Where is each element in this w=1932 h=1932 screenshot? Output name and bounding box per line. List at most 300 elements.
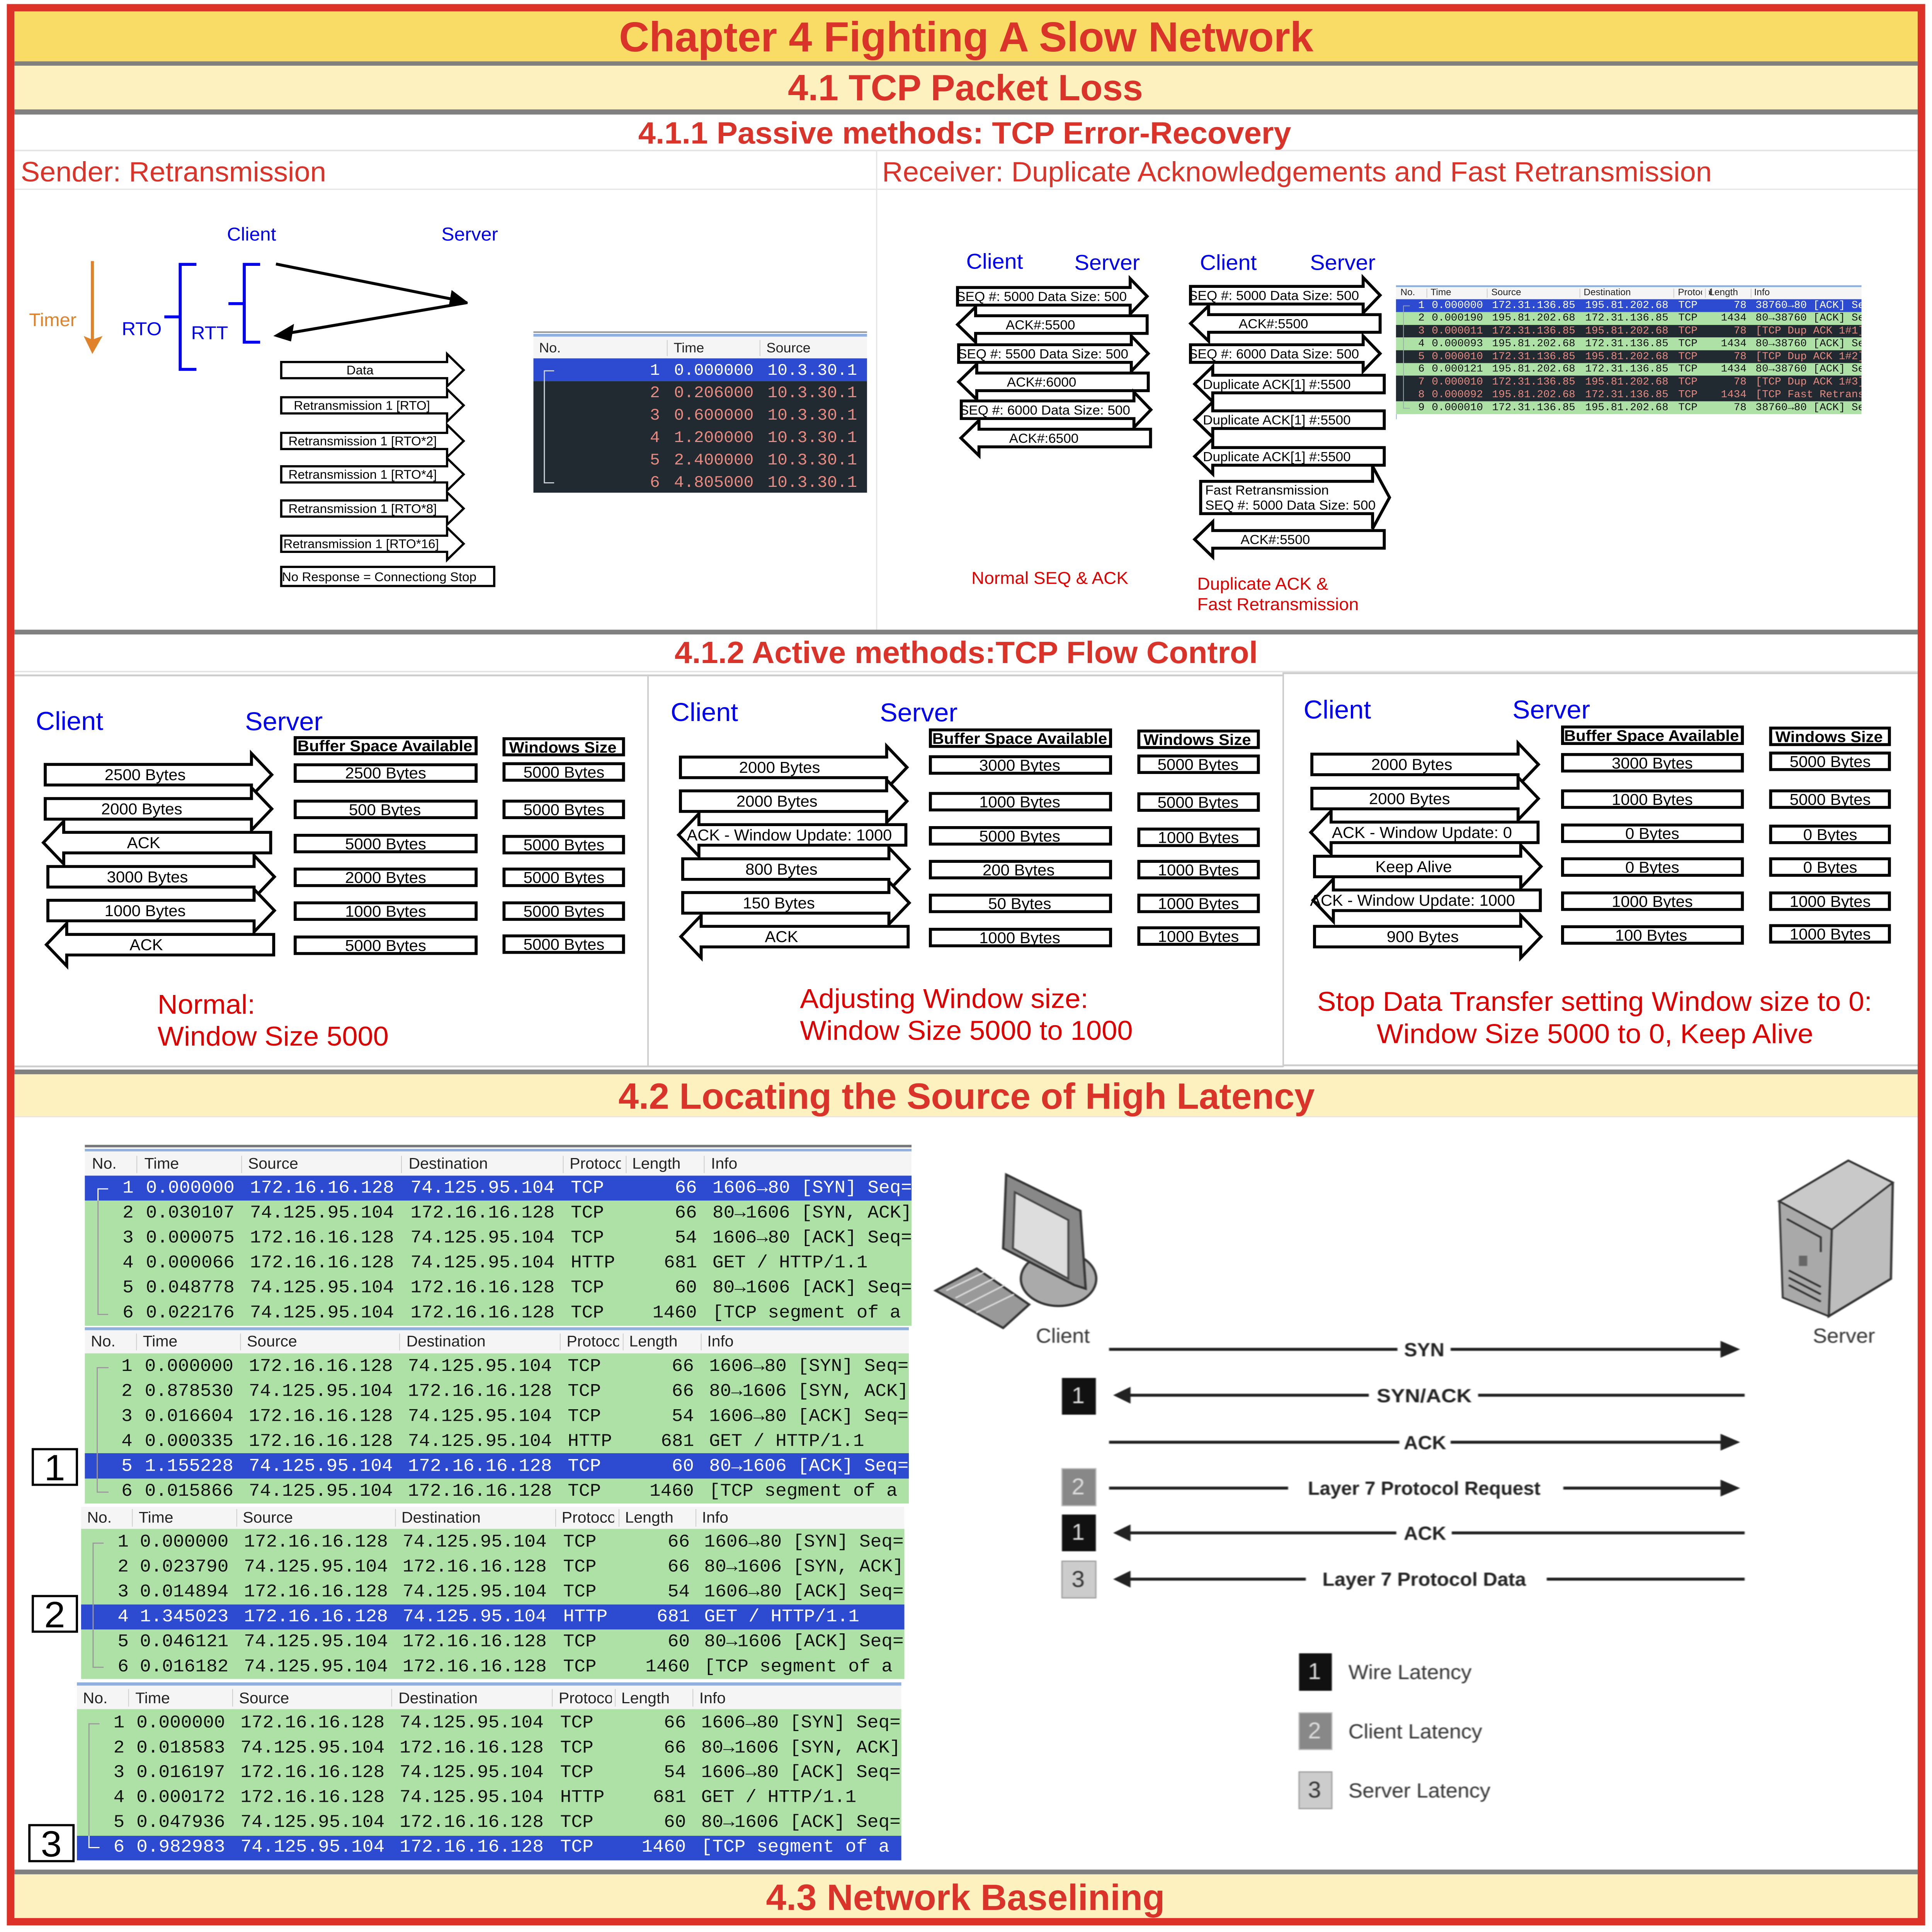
arrow: SEQ 6000: [960, 392, 1151, 427]
table: fast retransmission capture: 78: [1734, 402, 1747, 413]
arrow: ACK: ACK: [127, 834, 160, 852]
heading: 4.1.1 Passive methods: 4.1.1 Passive methods: TCP Error-Recovery: [638, 116, 1291, 150]
table: client latency capture: 0.023790: [140, 1557, 228, 1577]
table: server latency capture: HTTP: [560, 1787, 604, 1808]
arrow: 2000 Bytes: 2000 Bytes: [736, 793, 818, 810]
buffer values: 1000 Bytes: [979, 793, 1060, 811]
table: wire latency capture: 1: [121, 1357, 133, 1377]
title band: Chapter 4: Chapter 4 Fighting A Slow Network: [619, 14, 1314, 61]
client label: Client: [1304, 696, 1371, 724]
buffer values: 50 Bytes: [988, 895, 1051, 913]
buffer values: 5000 Bytes: [345, 835, 426, 853]
table: fast retransmission capture: 2: [1418, 312, 1425, 324]
table: baseline capture: No.: [92, 1155, 117, 1172]
table: client latency capture: 0.000000: [140, 1532, 228, 1552]
panel: normal flow control: [36, 707, 624, 1052]
title band: Chapter 4: [14, 11, 1918, 66]
arrow: ACK 6500: [961, 420, 1151, 456]
window values: 1000 Bytes: [1158, 829, 1239, 847]
table: fast retransmission capture: 195.81.202.68: [1585, 325, 1668, 337]
caption: stop transfer: Stop Data Transfer setting Window size to 0:: [1317, 986, 1872, 1017]
table: baseline capture: 2: [122, 1203, 134, 1223]
table: wire latency capture: 0.000335: [145, 1431, 233, 1452]
table: fast retransmission capture: 172.31.136.85: [1492, 325, 1575, 337]
arrow: duplicate ACK 1: Duplicate ACK[1] #:5500: [1203, 378, 1351, 392]
table: wire latency capture: 74.125.95.104: [249, 1381, 393, 1401]
table: fast retransmission capture: 7: [1418, 376, 1425, 388]
table: wire latency capture: TCP: [568, 1481, 601, 1502]
table: wire latency capture: 0.878530: [145, 1381, 233, 1401]
table: client latency capture: 66: [668, 1532, 690, 1552]
arrow: ACK: [46, 923, 274, 966]
arrow: RTO*4: Retransmission 1 [RTO*4]: [289, 467, 437, 481]
table: server latency capture: 1460: [641, 1837, 686, 1857]
table: wire latency capture: 172.16.16.128: [249, 1406, 393, 1427]
arrow: keep alive: Keep Alive: [1375, 858, 1452, 876]
legend: 1: [1308, 1658, 1321, 1684]
table: fast retransmission capture: 0.000093: [1432, 338, 1483, 350]
table: fast retransmission capture: 0.000092: [1432, 389, 1483, 401]
table: server latency capture: 80→1606 [ACK] Seq=1: [701, 1813, 912, 1833]
number box 3: 3: [41, 1823, 62, 1864]
number box 2: 2: [44, 1594, 65, 1635]
arrow: ACK: ACK: [765, 928, 798, 946]
table: wire latency capture: 2: [121, 1381, 133, 1401]
table: wire latency capture: 172.16.16.128: [408, 1456, 552, 1476]
table: server latency capture: Length: [621, 1689, 670, 1707]
table: wire latency capture: 74.125.95.104: [408, 1406, 552, 1427]
arrow: 3000 Bytes: [48, 855, 274, 898]
heading: 4.1.1 Passive methods: [14, 116, 1918, 630]
table: client latency capture: 6: [117, 1657, 129, 1677]
table: fast retransmission capture: 78: [1734, 300, 1747, 311]
number box 2: [33, 1594, 77, 1635]
table: fast retransmission capture: 0.000000: [1432, 300, 1483, 311]
server label: Server: [441, 224, 498, 245]
table: baseline capture: 66: [675, 1203, 697, 1223]
table: retransmission capture: 4.805000: [674, 473, 753, 492]
arrow: SEQ 6000: SEQ #: 6000 Data Size: 500: [960, 403, 1130, 418]
table: fast retransmission capture: 0.000010: [1432, 402, 1483, 413]
table: client latency capture: 5: [117, 1632, 129, 1652]
table: server latency capture: 172.16.16.128: [240, 1763, 384, 1783]
header: windows size: Windows Size: [1776, 728, 1883, 745]
table: baseline capture: [85, 1145, 978, 1326]
table: baseline capture: 80→1606 [ACK] Seq=1: [713, 1278, 923, 1298]
buffer values: 1000 Bytes: [979, 929, 1060, 947]
arrow: 2000 Bytes: [1312, 743, 1538, 786]
panel: adjusting window size: [671, 698, 1259, 1046]
caption: stop transfer: Window Size 5000 to 0, Keep Alive: [1377, 1019, 1813, 1049]
client label: Client: [671, 698, 738, 727]
table: fast retransmission capture: TCP: [1678, 351, 1697, 362]
table: baseline capture: 60: [675, 1278, 697, 1298]
table: fast retransmission capture: [1396, 285, 1916, 419]
table: wire latency capture: No.: [91, 1332, 116, 1350]
table: baseline capture: 0.022176: [146, 1303, 235, 1323]
window values: 5000 Bytes: [1158, 756, 1238, 773]
table: baseline capture: 3: [122, 1228, 134, 1248]
table: wire latency capture: [TCP segment of a: [709, 1481, 898, 1502]
table: baseline capture: TCP: [571, 1278, 604, 1298]
arrow: ACK 5500: ACK#:5500: [1239, 317, 1308, 331]
panel: stop data transfer: [1304, 696, 1889, 1049]
table: fast retransmission capture: 172.31.136.85: [1585, 312, 1668, 324]
table: client latency capture: 1460: [645, 1657, 690, 1677]
table: baseline capture: 172.16.16.128: [250, 1228, 394, 1248]
section band: 4.1 TCP Packet Loss: 4.1 TCP Packet Loss: [788, 68, 1143, 108]
buffer values: 200 Bytes: [983, 861, 1054, 879]
table: client latency capture: 0.046121: [140, 1632, 228, 1652]
arrow: Data: Data: [347, 363, 374, 377]
table: fast retransmission capture: 172.31.136.85: [1585, 389, 1668, 401]
table: client latency capture: Destination: [401, 1509, 481, 1526]
table: wire latency capture: 74.125.95.104: [408, 1357, 552, 1377]
table: retransmission capture: 10.3.30.1: [767, 473, 857, 492]
table: fast retransmission capture: TCP: [1678, 389, 1697, 401]
table: fast retransmission capture: 80→38760 [ACK] Seq=1: [1755, 312, 1884, 324]
icon: server latency 3: 3: [1071, 1566, 1085, 1592]
arrow: ACK: ACK: [1404, 1523, 1446, 1544]
table: server latency capture: 2: [114, 1738, 124, 1758]
table: client latency capture: 0.016182: [140, 1657, 228, 1677]
table: client latency capture: HTTP: [563, 1607, 607, 1627]
table: server latency capture: 0.016197: [136, 1763, 225, 1783]
arrow: ACK: [681, 915, 908, 958]
table: client latency capture: TCP: [563, 1657, 597, 1677]
table: fast retransmission capture: 78: [1734, 376, 1747, 388]
buffer values: 1000 Bytes: [345, 903, 426, 920]
table: client latency capture: 66: [668, 1557, 690, 1577]
table: wire latency capture: 60: [672, 1456, 694, 1476]
window values: 5000 Bytes: [524, 801, 604, 818]
table: server latency capture: 1: [114, 1713, 124, 1733]
arrow: layer 7 data: [1113, 1569, 1745, 1590]
table: wire latency capture: 1.155228: [145, 1456, 233, 1476]
icon: client latency 2: [1062, 1469, 1096, 1506]
arrow: SEQ 5000: [956, 279, 1147, 314]
table: fast retransmission capture: 3: [1418, 325, 1425, 337]
table: baseline capture: Info: [711, 1155, 737, 1172]
window values: 5000 Bytes: [524, 764, 604, 781]
arrow: RTO: [281, 389, 464, 422]
arrow: ACK 6500: ACK#:6500: [1009, 431, 1078, 446]
table: retransmission capture: 2.400000: [674, 451, 753, 469]
icon: wire latency 1: 1: [1071, 1519, 1085, 1545]
caption: duplicate: [1197, 574, 1359, 614]
table: fast retransmission capture: 0.000190: [1432, 312, 1483, 324]
table: fast retransmission capture: 8: [1418, 389, 1425, 401]
client label: Client: [1036, 1325, 1090, 1347]
table: fast retransmission capture: [TCP Dup ACK 1#2] 38: [1755, 351, 1884, 362]
panel: duplicate ACK and fast retransmission: [1189, 251, 1389, 614]
table: server latency capture: 0.982983: [136, 1837, 225, 1857]
table: server latency capture: 5: [114, 1813, 124, 1833]
table: fast retransmission capture: Time: [1430, 287, 1451, 298]
window values: 1000 Bytes: [1790, 893, 1871, 910]
caption: adjusting: Window Size 5000 to 1000: [800, 1015, 1133, 1046]
arrow: SEQ 5000: [1189, 277, 1380, 313]
arrow: RTO*8: [281, 492, 464, 525]
table: wire latency capture: Source: [247, 1332, 297, 1350]
arrow: RTO*4: [281, 458, 464, 490]
table: server latency capture: 66: [664, 1713, 686, 1733]
window values: 5000 Bytes: [524, 903, 604, 920]
table: baseline capture: 74.125.95.104: [410, 1253, 554, 1273]
table: fast retransmission capture: 6: [1418, 363, 1425, 375]
table: server latency capture: 172.16.16.128: [400, 1837, 544, 1857]
table: client latency capture: GET / HTTP/1.1: [704, 1607, 859, 1627]
table: baseline capture: 0.000066: [146, 1253, 235, 1273]
window values: 0 Bytes: [1803, 859, 1857, 876]
table: fast retransmission capture: TCP: [1678, 376, 1697, 388]
timer label: Timer: [29, 310, 77, 330]
table: server latency capture: GET / HTTP/1.1: [701, 1787, 856, 1808]
icon: wire latency 1: [1062, 1515, 1096, 1551]
table: fast retransmission capture: 195.81.202.68: [1585, 351, 1668, 362]
table: baseline capture: 1606→80 [ACK] Seq=1: [713, 1228, 923, 1248]
table: retransmission capture: 6: [650, 473, 660, 492]
caption: adjusting: Adjusting Window size:: [800, 983, 1088, 1014]
table: fast retransmission capture: 9: [1418, 402, 1425, 413]
table: client latency capture: Length: [625, 1509, 673, 1526]
table: retransmission capture: 0.206000: [674, 384, 753, 402]
icon: timer arrow: [84, 261, 102, 354]
panel: latency diagram: [935, 1161, 1893, 1809]
table: client latency capture: 1.345023: [140, 1607, 228, 1627]
window values: 1000 Bytes: [1158, 895, 1239, 913]
arrow: SYN: SYN: [1404, 1339, 1444, 1361]
caption: normal: [158, 989, 389, 1052]
buffer values: 100 Bytes: [1615, 927, 1687, 944]
header: buffer space: Buffer Space Available: [1564, 727, 1739, 744]
server label: Server: [1310, 251, 1376, 275]
table: wire latency capture: TCP: [568, 1357, 601, 1377]
section band: 4.3 Network Baselining: 4.3 Network Baselining: [766, 1877, 1165, 1918]
table: retransmission capture: [533, 332, 867, 493]
table: server latency capture: 74.125.95.104: [240, 1738, 384, 1758]
table: retransmission capture: 5: [650, 451, 660, 469]
arrow: ACK 5500: ACK#:5500: [1006, 318, 1075, 332]
table: fast retransmission capture: 172.31.136.85: [1585, 363, 1668, 375]
table: baseline capture: 681: [664, 1253, 697, 1273]
table: server latency capture: 74.125.95.104: [400, 1713, 544, 1733]
table: wire latency capture: [85, 1327, 975, 1503]
table: client latency capture: 172.16.16.128: [244, 1532, 388, 1552]
table: server latency capture: 681: [653, 1787, 686, 1808]
table: fast retransmission capture: 80→38760 [ACK] Seq=1: [1755, 363, 1884, 375]
table: baseline capture: 172.16.16.128: [410, 1203, 554, 1223]
table: server latency capture: Info: [699, 1689, 726, 1707]
table: fast retransmission capture: 4: [1418, 338, 1425, 350]
arrow: SEQ 6000: [1189, 336, 1380, 371]
table: client latency capture: 4: [117, 1607, 129, 1627]
table: wire latency capture: 80→1606 [SYN, ACK] Seq=0: [709, 1381, 975, 1401]
table: client latency capture: 74.125.95.104: [244, 1657, 388, 1677]
table: wire latency capture: Info: [707, 1332, 734, 1350]
table: fast retransmission capture: Source: [1492, 287, 1521, 298]
table: fast retransmission capture: TCP: [1678, 300, 1697, 311]
arrow: ACK 5500: [957, 307, 1147, 342]
arrow: RTO*2: [281, 425, 464, 457]
arrow: window update 0: ACK - Window Update: 0: [1332, 824, 1512, 841]
table: client latency capture: 1606→80 [SYN] Seq=0: [704, 1532, 915, 1552]
arrow: duplicate ACK 1: [1195, 366, 1384, 402]
server label: Server: [880, 699, 957, 727]
table: client latency capture: Time: [139, 1509, 173, 1526]
window values: [1139, 756, 1259, 945]
window values: 0 Bytes: [1803, 826, 1857, 844]
table: fast retransmission capture: 5: [1418, 351, 1425, 362]
arrow: SYN/ACK: SYN/ACK: [1377, 1385, 1472, 1406]
arrow: layer 7 request: [1109, 1478, 1740, 1499]
table: client latency capture: TCP: [563, 1582, 597, 1602]
table: fast retransmission capture: 78: [1734, 351, 1747, 362]
table: retransmission capture: No.: [539, 340, 561, 355]
window values: 5000 Bytes: [1790, 753, 1871, 770]
table: client latency capture: 3: [117, 1582, 129, 1602]
table: server latency capture: [77, 1682, 967, 1861]
table: server latency capture: TCP: [560, 1738, 594, 1758]
table: wire latency capture: 74.125.95.104: [249, 1456, 393, 1476]
arrow: layer 7 request: Layer 7 Protocol Request: [1308, 1478, 1541, 1499]
table: fast retransmission capture: Info: [1754, 287, 1770, 298]
table: server latency capture: 172.16.16.128: [240, 1713, 384, 1733]
table: baseline capture: TCP: [571, 1178, 604, 1198]
table: baseline capture: 80→1606 [SYN, ACK] Seq=0: [713, 1203, 978, 1223]
table: server latency capture: 1606→80 [SYN] Seq=0: [701, 1713, 912, 1733]
table: client latency capture: 172.16.16.128: [403, 1632, 547, 1652]
arrow: 800 Bytes: [683, 848, 909, 890]
table: baseline capture: 66: [675, 1178, 697, 1198]
table: fast retransmission capture: 195.81.202.68: [1585, 402, 1668, 413]
arrow: RTO*2: Retransmission 1 [RTO*2]: [289, 434, 437, 448]
table: baseline capture: 74.125.95.104: [410, 1228, 554, 1248]
arrow: 2000 Bytes: 2000 Bytes: [101, 800, 182, 818]
buffer values: 3000 Bytes: [1612, 754, 1693, 772]
arrow: keep alive: [1315, 845, 1541, 888]
RTT bracket: [228, 264, 260, 342]
table: wire latency capture: HTTP: [568, 1431, 612, 1452]
buffer values: 3000 Bytes: [979, 757, 1060, 774]
table: server latency capture: 60: [664, 1813, 686, 1833]
client label: Client: [966, 250, 1023, 274]
legend: [1299, 1653, 1490, 1809]
table: wire latency capture: 1606→80 [ACK] Seq=1: [709, 1406, 920, 1427]
table: retransmission capture: 0.000000: [674, 362, 753, 380]
number box 1: [33, 1447, 77, 1488]
caption: duplicate: Duplicate ACK &: [1197, 574, 1328, 594]
table: server latency capture: 74.125.95.104: [240, 1837, 384, 1857]
table: server latency capture: 54: [664, 1763, 686, 1783]
legend: Client Latency: [1349, 1720, 1482, 1743]
table: retransmission capture: 10.3.30.1: [767, 429, 857, 447]
number box 3: [29, 1823, 73, 1864]
table: baseline capture: 5: [122, 1278, 134, 1298]
arrow: duplicate ACK 2: Duplicate ACK[1] #:5500: [1203, 413, 1351, 427]
arrow: RTO: Retransmission 1 [RTO]: [294, 398, 430, 412]
legend: 2: [1308, 1718, 1321, 1743]
table: wire latency capture: Destination: [406, 1332, 486, 1350]
table: baseline capture: 172.16.16.128: [410, 1303, 554, 1323]
table: baseline capture: Source: [248, 1155, 298, 1172]
arrow: 2500 Bytes: 2500 Bytes: [105, 766, 186, 784]
table: client latency capture: [81, 1507, 970, 1679]
table: fast retransmission capture: [TCP Fast Retransmission]: [1755, 389, 1916, 401]
table: baseline capture: 0.000000: [146, 1178, 235, 1198]
table: client latency capture: Info: [702, 1509, 728, 1526]
table: wire latency capture: 0.000000: [145, 1357, 233, 1377]
table: server latency capture: 74.125.95.104: [240, 1813, 384, 1833]
arrow: Data: [281, 354, 464, 386]
table: baseline capture: 54: [675, 1228, 697, 1248]
table: server latency capture: 3: [114, 1763, 124, 1783]
table: baseline capture: 74.125.95.104: [250, 1278, 394, 1298]
arrow: 2000 Bytes: 2000 Bytes: [1371, 756, 1452, 773]
table: retransmission capture: 4: [650, 429, 660, 447]
table: wire latency capture: 5: [121, 1456, 133, 1476]
table: baseline capture: TCP: [571, 1303, 604, 1323]
arrow: 2000 Bytes: [680, 746, 907, 789]
table: wire latency capture: 66: [672, 1381, 694, 1401]
arrow: fast retransmission: [1201, 466, 1389, 529]
heading: 4.1.2 Active methods: [14, 630, 1918, 1067]
arrow: ACK: [43, 821, 270, 864]
table: baseline capture: 0.000075: [146, 1228, 235, 1248]
table: server latency capture: Time: [135, 1689, 170, 1707]
client label: Client: [227, 224, 276, 245]
table: client latency capture: 172.16.16.128: [403, 1557, 547, 1577]
table: wire latency capture: 80→1606 [ACK] Seq=1: [709, 1456, 920, 1476]
table: fast retransmission capture: 0.000121: [1432, 363, 1483, 375]
arrow: 2000 Bytes: [680, 780, 907, 822]
table: fast retransmission capture: Length: [1709, 287, 1738, 298]
arrow: 2000 Bytes: 2000 Bytes: [739, 759, 820, 776]
table: server latency capture: No.: [83, 1689, 107, 1707]
caption: adjusting: [800, 983, 1133, 1046]
buffer values: 1000 Bytes: [1612, 893, 1693, 910]
section band: 4.1 TCP Packet Loss: [14, 66, 1918, 114]
table: fast retransmission capture: 0.000011: [1432, 325, 1483, 337]
arrow: SYN: [1109, 1339, 1740, 1361]
arrow: SEQ 6000: SEQ #: 6000 Data Size: 500: [1189, 347, 1359, 361]
table: retransmission capture: Source: [766, 340, 811, 355]
table: server latency capture: [TCP segment of a: [701, 1837, 889, 1857]
arrow: request and response: [273, 264, 468, 342]
table: baseline capture: HTTP: [571, 1253, 615, 1273]
table: client latency capture: 681: [657, 1607, 690, 1627]
table: wire latency capture: 6: [121, 1481, 133, 1502]
table: server latency capture: 66: [664, 1738, 686, 1758]
table: baseline capture: 1: [122, 1178, 134, 1198]
box: no response: No Response = Connectiong Stop: [282, 570, 476, 584]
server label: Server: [245, 707, 323, 736]
table: fast retransmission capture: [TCP Dup ACK 1#1] 38: [1755, 325, 1884, 337]
table: client latency capture: Protocol: [562, 1509, 620, 1526]
table: client latency capture: 74.125.95.104: [244, 1557, 388, 1577]
buffer values: [930, 757, 1111, 947]
number box 1: 1: [44, 1447, 65, 1488]
table: retransmission capture: 10.3.30.1: [767, 406, 857, 425]
arrow: SEQ 5000: SEQ #: 5000 Data Size: 500: [956, 290, 1127, 304]
window values: 5000 Bytes: [524, 836, 604, 854]
table: baseline capture: 0.030107: [146, 1203, 235, 1223]
table: client latency capture: 1: [117, 1532, 129, 1552]
window values: 5000 Bytes: [1790, 791, 1871, 808]
table: fast retransmission capture: 38760→80 [ACK] Seq=1: [1755, 402, 1884, 413]
table: wire latency capture: 0.015866: [145, 1481, 233, 1502]
table: wire latency capture: TCP: [568, 1381, 601, 1401]
